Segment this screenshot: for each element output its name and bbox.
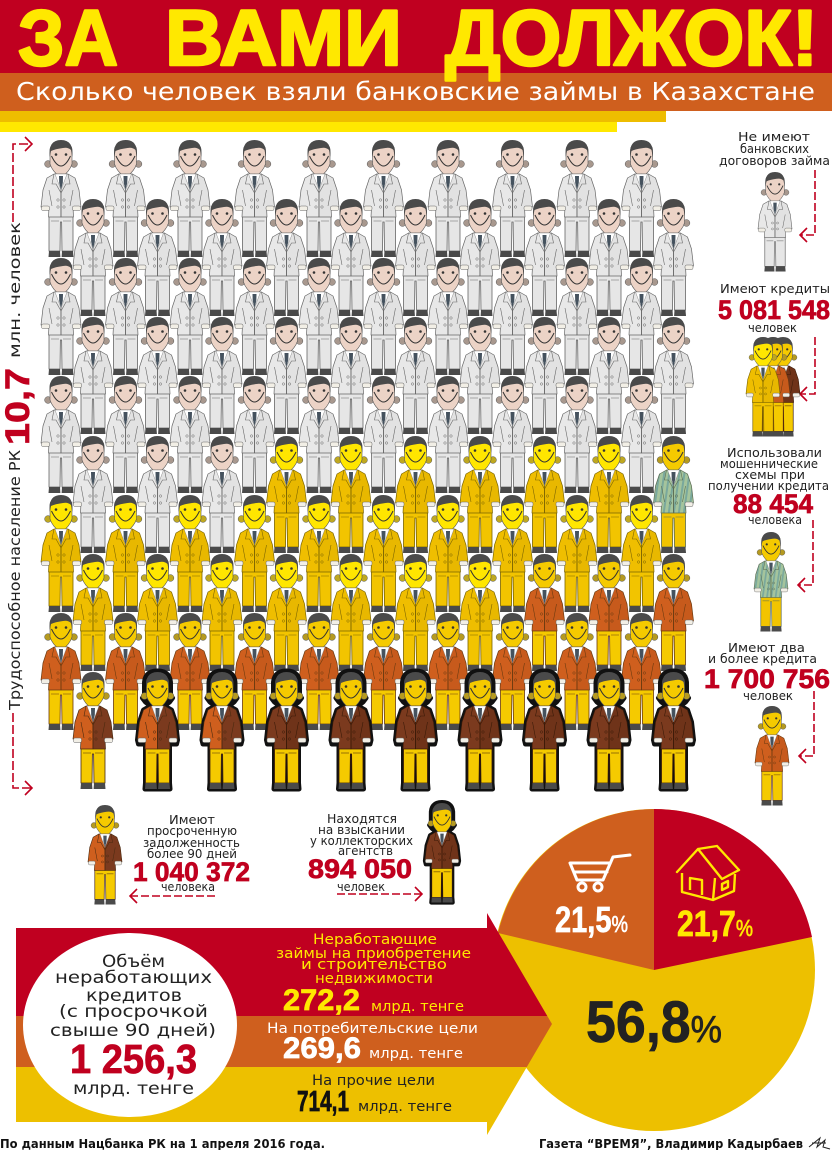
real estate loans text: млрд. тенге (371, 999, 464, 1015)
real estate loans text: Неработающие (313, 932, 437, 948)
legend: with collection agencies: Находятся (327, 811, 397, 826)
legend: with collection agencies: человек (337, 879, 385, 894)
legend: fraudulent schemes: схемы при (735, 467, 805, 482)
row 7 (41, 495, 662, 612)
icon: house (677, 846, 739, 900)
row 10 (73, 671, 694, 789)
left axis: working population label with arrows: млн. человек (6, 222, 24, 358)
legend: with collection agencies: на взыскании (318, 822, 405, 837)
legend: two or more loans: 1 700 756 (704, 664, 830, 694)
real estate loans text (276, 932, 471, 1017)
legend: with collection agencies: у коллекторских (310, 833, 413, 848)
white circle: total: (с просрочкой (59, 1002, 208, 1022)
legend: fraudulent schemes: мошеннические (720, 456, 818, 471)
white circle: total: свыше 90 дней) (50, 1021, 216, 1041)
pie label: other: 56,8% (586, 990, 722, 1055)
legend: overdue more than 90 days: более 90 дней (147, 846, 237, 861)
legend: fraudulent schemes: человека (748, 512, 802, 527)
legend: two or more loans: человек (743, 688, 793, 703)
people grid: 10.7 million working population (41, 140, 694, 789)
legend: fraudulent schemes (708, 445, 829, 631)
subtitle band (0, 73, 832, 111)
legend: no bank loans: Не имеют (738, 129, 810, 144)
legend: with collection agencies: агентств (338, 843, 393, 858)
legend: no bank loans: банковских (740, 141, 809, 156)
real estate loans text: недвижимости (315, 971, 433, 987)
real estate loans text: 272,2 (283, 984, 360, 1017)
left axis: working population label with arrows (0, 137, 37, 795)
row 3 (41, 258, 662, 375)
pie label: consumer: 21,5% (555, 899, 628, 940)
left axis: working population label with arrows: 10,7 (0, 368, 37, 445)
consumer loans text: На потребительские цели (267, 1021, 478, 1037)
subtitle: Сколько человек взяли банковские займы в Казахстане (16, 77, 815, 106)
legend: overdue more than 90 days: человека (161, 879, 215, 894)
legend: fraudulent schemes: Использовали (727, 445, 822, 460)
legend: no bank loans: договоров займа (719, 153, 830, 168)
row 5 (41, 376, 662, 493)
legend: overdue more than 90 days: 1 040 372 (133, 857, 250, 887)
legend: with collection agencies: 894 050 (308, 854, 412, 884)
header band: yellow stripe (0, 122, 617, 132)
legend: two or more loans (704, 640, 830, 805)
legend: with collection agencies (308, 802, 459, 902)
row 9 (41, 613, 662, 730)
white circle: total (23, 933, 237, 1117)
legend: two or more loans: Имеют два (728, 640, 805, 655)
consumer loans text (267, 1021, 478, 1065)
row 6 (73, 436, 694, 553)
legend: have loans: Имеют кредиты (720, 281, 830, 296)
white circle: total: млрд. тенге (73, 1079, 194, 1099)
white circle: total: кредитов (86, 986, 182, 1006)
other loans text (297, 1073, 452, 1118)
header band: amber stripe (0, 111, 666, 122)
legend: overdue more than 90 days: задолженность (143, 835, 240, 850)
legend: overdue more than 90 days (88, 805, 250, 904)
arrow panel: non-performing loans (16, 913, 552, 1135)
legend: overdue more than 90 days: просроченную (147, 823, 237, 838)
consumer loans text: млрд. тенге (369, 1046, 463, 1062)
consumer loans text: 269,6 (283, 1032, 361, 1065)
row 1 (41, 140, 662, 257)
legend: have loans: человек (748, 320, 797, 335)
legend: two or more loans: и более кредита (708, 651, 817, 666)
icon: shopping cart (570, 855, 630, 891)
left axis: working population label with arrows: Трудоспособное население РК (6, 450, 24, 711)
legend: have loans (718, 281, 830, 436)
other loans text: млрд. тенге (358, 1099, 452, 1115)
white circle: total: 1 256,3 (70, 1036, 197, 1082)
real estate loans text: и строительство (301, 957, 447, 973)
row 4 (73, 317, 694, 434)
legend: fraudulent schemes: 88 454 (733, 489, 813, 519)
title (18, 0, 818, 82)
other loans text: На прочие цели (312, 1073, 435, 1089)
white circle: total: неработающих (55, 968, 212, 988)
row 8 (73, 554, 694, 671)
header band: red title background (0, 0, 832, 73)
pie label: real estate: 21,7% (677, 903, 753, 944)
real estate loans text: займы на приобретение (276, 946, 471, 962)
other loans text: 714,1 (297, 1086, 349, 1118)
legend: no bank loans (719, 129, 830, 271)
legend: overdue more than 90 days: Имеют (169, 812, 215, 827)
pie chart (493, 809, 815, 1131)
row 2 (73, 199, 694, 316)
white circle: total: Объём (102, 952, 165, 972)
signature (809, 1138, 830, 1149)
